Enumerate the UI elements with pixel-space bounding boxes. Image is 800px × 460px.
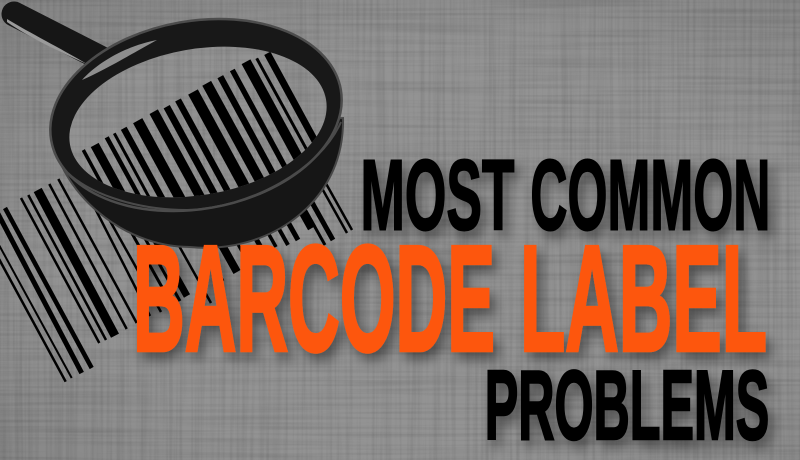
magnifying glass (2, 2, 344, 249)
rim lower highlight (68, 122, 341, 210)
lens glass view (69, 46, 327, 198)
title (133, 140, 770, 460)
barcode (0, 85, 352, 382)
lens rim (35, 0, 357, 233)
lens glare (82, 40, 157, 80)
icon: handle (7, 14, 112, 64)
title line: most common: MOST (360, 140, 514, 252)
magnified barcode (82, 52, 316, 198)
lens body (52, 118, 343, 248)
